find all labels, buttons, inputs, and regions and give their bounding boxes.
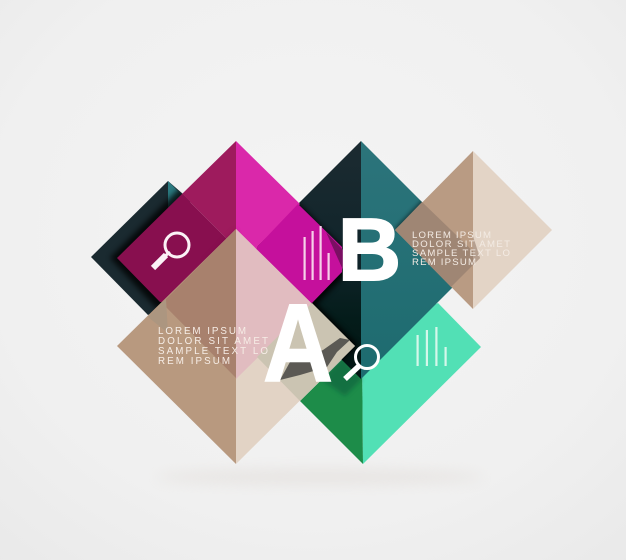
icon: magnifier on green: [345, 346, 378, 379]
heading letter B: B: [338, 200, 401, 299]
infographic: [91, 141, 552, 483]
text block B: DOLOR SIT AMET: [412, 239, 510, 250]
text block B: LOREM IPSUM: [412, 230, 491, 241]
text block A: [158, 326, 268, 367]
panel: right tan diamond: [395, 151, 552, 309]
text block B: SAMPLE TEXT LO: [412, 248, 510, 259]
icon: bars on magenta: [304, 226, 330, 280]
text block A: REM IPSUM: [158, 356, 230, 367]
panel: large tan diamond A: [117, 229, 355, 464]
chevron shadow: [280, 338, 350, 380]
panel: small dark diamond: [91, 181, 190, 315]
text block A: SAMPLE TEXT LO: [158, 346, 268, 357]
ground shadow: [155, 469, 485, 485]
heading letter A: A: [263, 282, 333, 405]
text block B: REM IPSUM: [412, 257, 476, 268]
icon: bars on mint: [416, 327, 447, 366]
text block A: LOREM IPSUM: [158, 326, 246, 337]
text block A: DOLOR SIT AMET: [158, 336, 268, 347]
panel: green diamond: [300, 303, 481, 464]
panel: magenta diamond: [117, 141, 343, 303]
text block B: [412, 230, 510, 268]
panel: B teal diamond: [256, 141, 452, 379]
icon: magnifier on magenta: [153, 233, 189, 268]
